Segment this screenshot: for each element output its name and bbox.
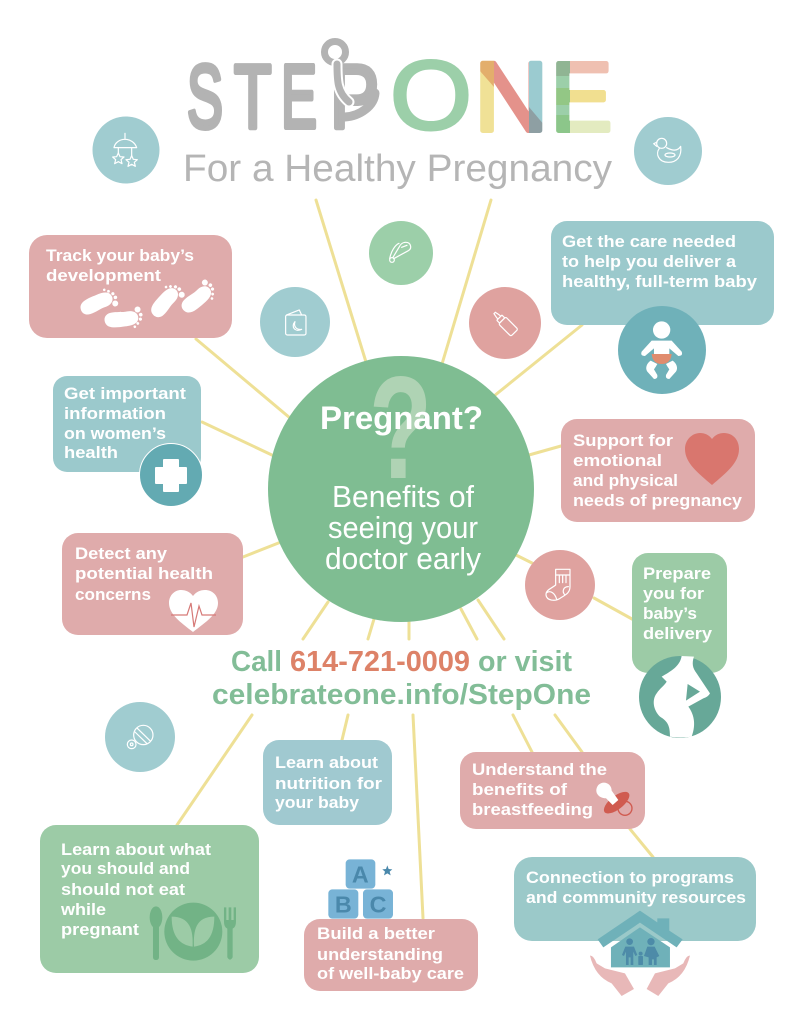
call to action: celebrateone.info/StepOne (212, 679, 591, 711)
panel: emotional support (561, 419, 755, 522)
text: breastfeeding: benefits of (472, 780, 567, 799)
text: delivery: baby’s (643, 604, 697, 623)
logo letters STEP: P (330, 48, 379, 148)
text: support: emotional (573, 451, 662, 470)
call to action: Call (231, 646, 282, 678)
center subtitle: doctor early (325, 541, 481, 576)
text: track: Track your baby’s (46, 246, 194, 265)
icon: alphabet blocks: B (335, 892, 352, 918)
text: detect: Detect any (75, 544, 168, 563)
panel: what to eat (40, 825, 259, 973)
text: track: development (46, 266, 161, 285)
panel: community resources (514, 857, 756, 996)
center subtitle: seeing your (328, 510, 478, 545)
text: support: Support for (573, 431, 673, 450)
panel: full-term care (551, 221, 774, 394)
call to action: 614-721-0009 (290, 646, 470, 678)
heading: Pregnant?: Pregnant? (320, 400, 483, 436)
text: delivery: delivery (643, 624, 713, 643)
text: detect: potential health (75, 564, 213, 583)
panel: women's health (53, 376, 202, 506)
logo: Step One (187, 40, 612, 152)
icon: rattle (105, 702, 175, 772)
text: support: and physical (573, 471, 678, 490)
icon: safety pin top of P (324, 42, 375, 117)
connector lines (177, 200, 653, 918)
icon: heart (685, 433, 739, 485)
text: well-baby: Build a better (317, 924, 435, 943)
panel: well-baby care (304, 919, 478, 991)
text: care: Get the care needed (562, 232, 736, 251)
question mark: ? (369, 346, 432, 509)
text: women's health: information (64, 404, 166, 423)
text: detect (75, 544, 213, 604)
text: nutrition: your baby (275, 793, 360, 812)
icon: moon card (260, 287, 330, 357)
icon: house, family and hands (590, 911, 690, 996)
icon: pregnant silhouette (639, 656, 721, 738)
icon: alphabet blocks: A (352, 862, 369, 888)
text: women's health: Get important (64, 384, 186, 403)
text: eat (60, 840, 211, 939)
icon: baby bottle (469, 287, 541, 359)
call to action (212, 646, 591, 711)
text: community (526, 868, 746, 907)
icon: safety pin (369, 221, 433, 285)
center subtitle: Benefits of (332, 479, 474, 514)
icon: rubber duck (634, 117, 702, 185)
logo letters STEP (187, 48, 379, 148)
text: delivery (643, 564, 713, 643)
panel: center circle (268, 346, 534, 622)
text: breastfeeding: Understand the (472, 760, 607, 779)
icon: plate with leaves (150, 903, 236, 961)
text: track (46, 246, 194, 285)
text: well-baby: understanding (317, 945, 443, 964)
icon: baby mobile (92, 116, 160, 184)
icon: baby sock (525, 550, 595, 620)
panel: baby's delivery (632, 553, 727, 738)
text: nutrition: Learn about (275, 753, 378, 772)
text: well-baby (317, 924, 464, 983)
logo letter E: E (551, 42, 612, 152)
text: care (562, 232, 758, 291)
text: eat: pregnant (61, 920, 139, 939)
text: nutrition (275, 753, 382, 812)
logo letter N: N (474, 42, 548, 152)
icon: alphabet blocks (328, 859, 393, 919)
text: delivery: Prepare (643, 564, 711, 583)
logo letters STEP: S (187, 48, 223, 148)
logo letters STEP: T (234, 48, 272, 148)
panel: nutrition (263, 740, 392, 825)
panel: track development (29, 235, 232, 338)
icon: medical cross (140, 444, 202, 506)
text: eat: Learn about what (61, 840, 211, 859)
text: breastfeeding (472, 760, 607, 819)
text: delivery: you for (643, 584, 704, 603)
text: well-baby: of well-baby care (317, 964, 464, 983)
icon: footprints (78, 276, 220, 338)
text: women's health: health (64, 443, 118, 462)
logo letters STEP: E (281, 48, 317, 148)
text: women's health: on women’s (64, 424, 166, 443)
text: breastfeeding: breastfeeding (472, 800, 593, 819)
text: detect: concerns (75, 585, 151, 604)
icon: baby (618, 306, 706, 394)
call to action: or visit (478, 646, 573, 678)
icon: alphabet blocks: C (370, 892, 387, 918)
panel: detect concerns (62, 533, 243, 635)
icon: pacifier (596, 783, 633, 817)
logo letter O: O (390, 40, 472, 150)
text: support (573, 431, 743, 510)
tagline: For a Healthy Pregnancy (183, 148, 612, 190)
text: eat: should not eat (61, 880, 185, 899)
text: eat: you should and (61, 859, 190, 878)
panel: breastfeeding (460, 752, 645, 829)
text: nutrition: nutrition for (275, 774, 382, 793)
icon: heart with pulse (169, 590, 218, 632)
text: care: to help you deliver a (562, 252, 737, 271)
text: women's health (64, 384, 186, 462)
text: community: Connection to programs (526, 868, 734, 887)
text: eat: while (60, 900, 106, 919)
text: community: and community resources (526, 888, 746, 907)
center subtitle (325, 479, 481, 576)
text: support: needs of pregnancy (573, 491, 743, 510)
text: care: healthy, full-term baby (562, 272, 758, 291)
